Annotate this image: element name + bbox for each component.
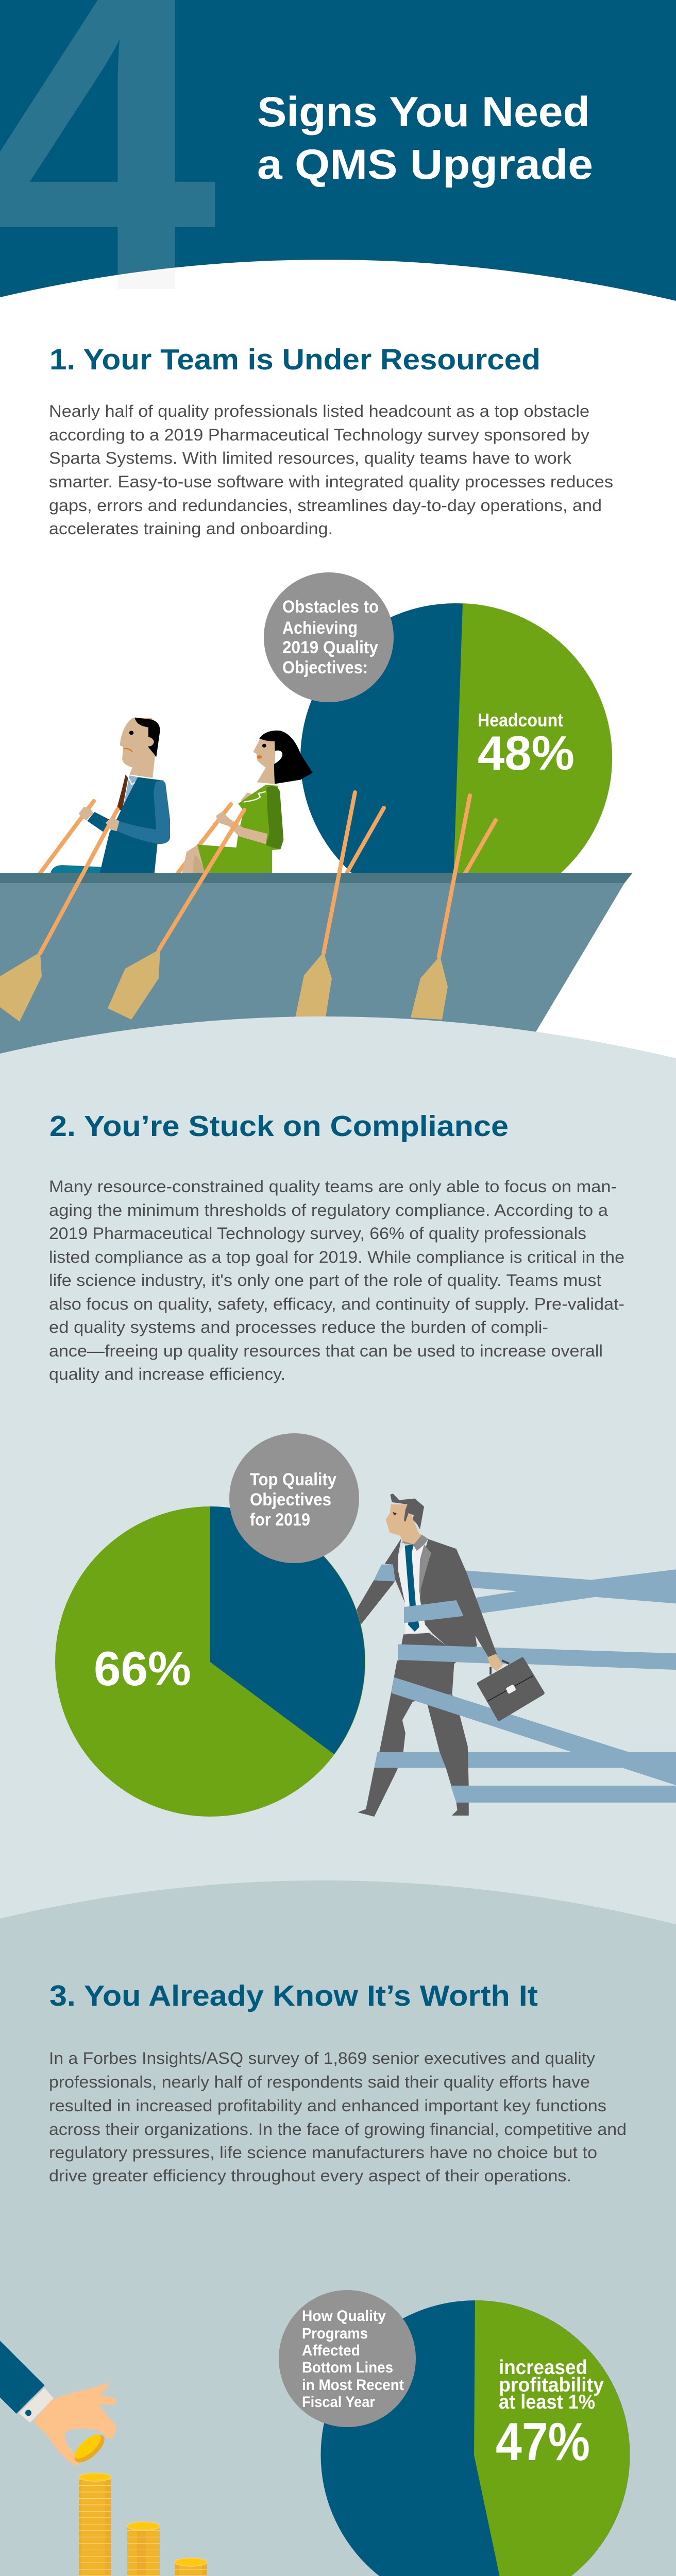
text block: section 2 body: life science industry, it's only one part of the role of quality. Teams must xyxy=(49,1271,601,1290)
text block: section 3 body: regulatory pressures, life science manufacturers have no choice but to xyxy=(49,2143,597,2162)
panel: section 2 background xyxy=(0,1016,676,1958)
value: 47%: 47% xyxy=(496,2412,590,2472)
text block: section 3 body: professionals, nearly half of respondents said their quality efforts have xyxy=(49,2073,590,2091)
text block: section 1 body xyxy=(49,402,613,538)
text block: section 3 body: drive greater efficiency throughout every aspect of their operations. xyxy=(49,2166,571,2185)
pie chart: bottom lines 47% xyxy=(320,2300,630,2576)
text block: section 2 body: listed compliance as a top goal for 2019. While compliance is critical in the xyxy=(49,1248,624,1266)
text block: section 1 body: Nearly half of quality professionals listed headcount as a top obstacle xyxy=(49,402,589,420)
text block: section 1 body: gaps, errors and redundancies, streamlines day-to-day operations, and xyxy=(49,496,602,515)
callout: top quality objectives circle: Top Quality xyxy=(250,1470,336,1489)
text block: section 3 body: In a Forbes Insights/ASQ survey of 1,869 senior executives and quality xyxy=(49,2049,595,2067)
oars behind the rowers xyxy=(38,801,496,876)
text block: section 2 body: ed quality systems and processes reduce the burden of compli- xyxy=(49,1318,548,1336)
text block: section 3 body: across their organizations. In the face of growing financial, competitive and xyxy=(49,2120,627,2139)
label: increased profitability xyxy=(499,2357,604,2413)
callout: how quality programs circle xyxy=(279,2290,416,2427)
callout: obstacles circle: Achieving xyxy=(282,618,358,638)
text block: section 2 body: Many resource-constrained quality teams are only able to focus on man- xyxy=(49,1177,617,1196)
text block: section 1 body: accelerates training and onboarding. xyxy=(49,519,333,538)
text block: section 2 body: ance—freeing up quality resources that can be used to increase overall xyxy=(49,1342,603,1360)
panel: section 1 background xyxy=(0,260,676,1133)
illustration: female rower xyxy=(182,731,313,873)
text block: section 3 body xyxy=(49,2049,627,2185)
pie chart: top quality objectives 66% xyxy=(55,1506,365,1817)
value: 48%: 48% xyxy=(478,726,574,780)
rower hands on oars xyxy=(106,818,120,831)
callout: top quality objectives circle: for 2019 xyxy=(250,1510,310,1530)
title: a QMS Upgrade xyxy=(257,141,593,188)
text block: section 2 body: aging the minimum thresholds of regulatory compliance. According to a xyxy=(49,1201,608,1219)
illustration: hand dropping a coin xyxy=(0,2341,117,2467)
text block: section 2 body: also focus on quality, safety, efficacy, and continuity of supply. Pre-validat- xyxy=(49,1295,624,1313)
bar chart: declining coin stacks xyxy=(79,2473,398,2576)
text block: section 1 body: Sparta Systems. With limited resources, quality teams have to work xyxy=(49,449,572,467)
text block: section 1 body: smarter. Easy-to-use software with integrated quality processes reduces xyxy=(49,472,613,491)
panel: header xyxy=(0,0,676,383)
oars in front of the boat xyxy=(0,792,470,1022)
briefcase xyxy=(479,1659,543,1719)
callout: how quality programs circle: Bottom Lines xyxy=(302,2359,393,2376)
title: Signs You Need xyxy=(257,89,590,135)
heading: section 1: 1. Your Team is Under Resourced xyxy=(49,343,540,376)
label: increased profitability: increased xyxy=(499,2357,587,2379)
value: 66%: 66% xyxy=(94,1641,191,1696)
callout: how quality programs circle: How Quality xyxy=(302,2308,386,2325)
callout: top quality objectives circle xyxy=(229,1433,359,1563)
text block: section 2 body: 2019 Pharmaceutical Technology survey, 66% of quality professionals xyxy=(49,1224,586,1243)
illustration: male rower xyxy=(50,718,170,873)
callout: how quality programs circle: Fiscal Year xyxy=(302,2394,375,2411)
label: increased profitability: at least 1% xyxy=(499,2391,595,2413)
text block: section 2 body: quality and increase efficiency. xyxy=(49,1365,285,1383)
callout: how quality programs circle: Affected xyxy=(302,2342,360,2359)
label: headcount: Headcount xyxy=(478,709,563,731)
title xyxy=(257,89,593,188)
callout: obstacles circle: Objectives: xyxy=(282,658,368,677)
panel: section 3 background xyxy=(0,1880,676,2576)
heading: section 3: 3. You Already Know It’s Worth It xyxy=(49,1979,538,2012)
heading: section 2: 2. You’re Stuck on Compliance xyxy=(49,1110,509,1143)
text block: section 1 body: according to a 2019 Pharmaceutical Technology survey sponsored by xyxy=(49,426,589,444)
callout: obstacles circle xyxy=(264,572,394,702)
label: increased profitability: profitability xyxy=(499,2374,604,2396)
callout: how quality programs circle: Programs xyxy=(302,2325,368,2342)
callout: how quality programs circle: in Most Recent xyxy=(302,2377,404,2394)
callout: obstacles circle: Obstacles to xyxy=(282,597,379,617)
callout: obstacles circle: 2019 Quality xyxy=(282,638,378,657)
illustration: businessman tied by bands xyxy=(357,1494,676,1817)
text block: section 2 body xyxy=(49,1177,624,1383)
text block: section 3 body: resulted in increased profitability and enhanced important key functions xyxy=(49,2096,606,2115)
callout: top quality objectives circle: Objectives xyxy=(250,1490,331,1510)
pie chart: obstacles, headcount 48% xyxy=(300,603,612,912)
illustration: boat hull xyxy=(0,873,633,1066)
